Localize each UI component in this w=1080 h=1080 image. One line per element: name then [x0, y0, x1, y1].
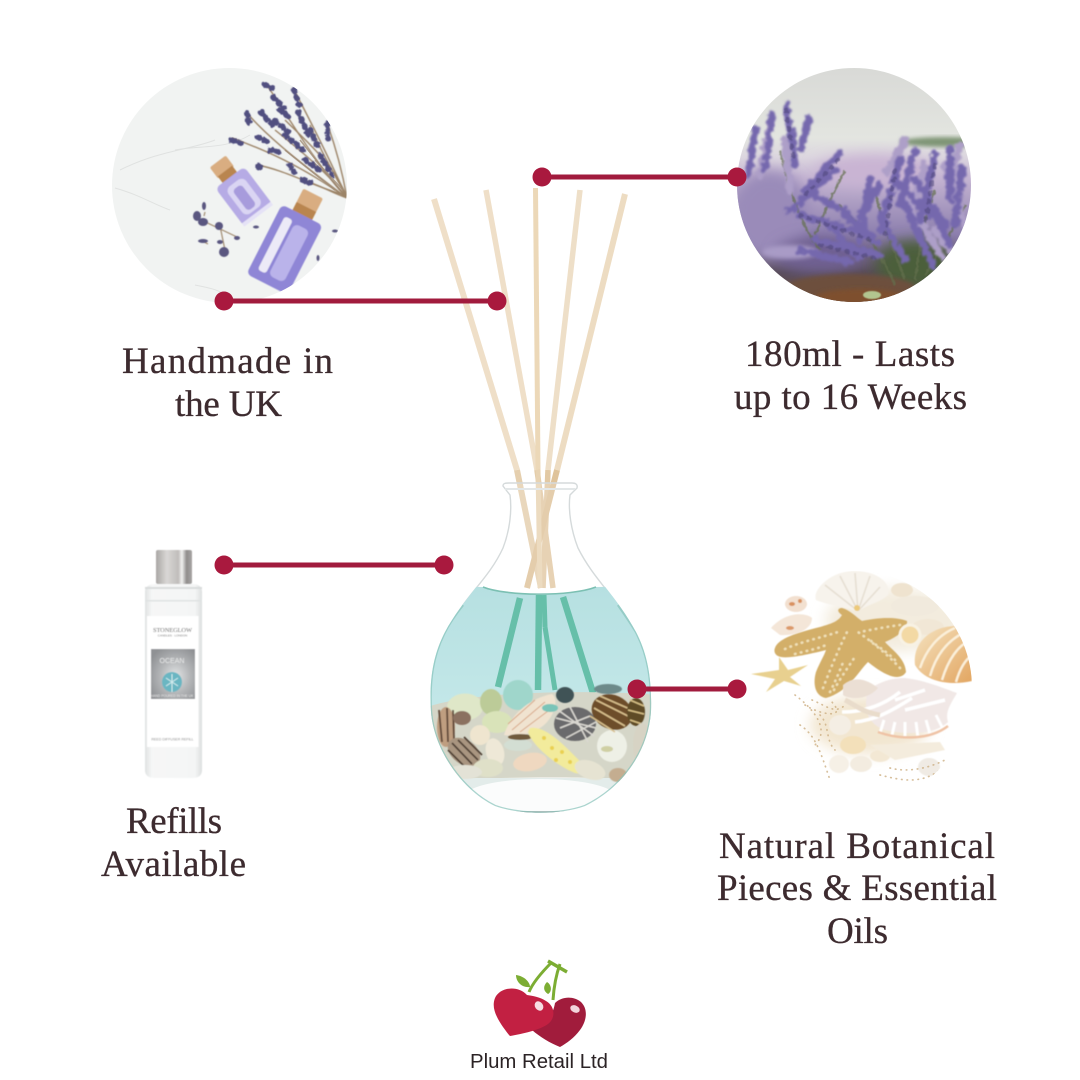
refill bottle product: OCEAN	[160, 658, 184, 665]
reeds within neck	[517, 470, 541, 588]
small bottle	[210, 156, 272, 226]
submerged reeds	[498, 595, 593, 693]
refill bottle cap	[156, 550, 192, 584]
refill bottle product: HAND POURED IN THE UK	[151, 694, 194, 698]
text: natural botanical pieces and essential oils: Oils	[827, 911, 888, 952]
conch shell	[842, 678, 957, 738]
small shells upper left	[771, 583, 944, 635]
text: handmade in the UK: Handmade in	[122, 341, 333, 382]
shell bed background	[425, 692, 660, 782]
logo red heart	[494, 989, 553, 1036]
large bottle	[248, 188, 323, 292]
liquid	[420, 586, 660, 720]
logo: Plum Retail Ltd	[470, 961, 608, 1073]
photo circle: lavender oil bottles	[110, 66, 350, 320]
text: natural botanical pieces and essential oils: Pieces & Essential	[717, 868, 997, 909]
text: handmade in the UK: the UK	[175, 384, 282, 425]
small lavender sprig	[193, 202, 338, 261]
connector: refills	[214, 556, 454, 574]
bottom clear base	[462, 778, 618, 790]
logo stems and leaves	[529, 961, 567, 1000]
starfish	[774, 608, 907, 698]
refill bottle product: REED DIFFUSER REFILL	[151, 738, 194, 742]
refill bottle product: CANDLES · LONDON	[158, 634, 187, 638]
reed diffuser bottle with shells	[420, 483, 660, 820]
glass outline lower	[431, 605, 651, 813]
round shell	[900, 625, 920, 645]
shells	[437, 680, 651, 784]
text: 180ml lasts up to 16 weeks: 180ml - Lasts	[745, 334, 955, 375]
refill bottle product: STONEGLOW	[153, 627, 193, 634]
text: refills available: Available	[101, 844, 246, 885]
text: 180ml lasts up to 16 weeks: up to 16 Weeks	[734, 377, 967, 418]
lavender blooms	[748, 104, 965, 285]
top scallop shell	[815, 571, 889, 612]
lavender bunch	[232, 85, 347, 198]
glass outline upper	[463, 483, 618, 605]
refill bottle body	[145, 584, 202, 778]
connector: handmade	[214, 292, 506, 310]
logo name: Plum Retail Ltd	[470, 1051, 608, 1073]
text: natural botanical pieces and essential oils: Natural Botanical	[719, 826, 995, 867]
refill bottle product	[145, 550, 202, 778]
photo circle: lavender field	[737, 68, 971, 302]
little shells lower area	[829, 715, 945, 776]
text: refills available: Refills	[126, 801, 222, 842]
small starfish	[751, 657, 808, 692]
connector: 180ml	[532, 168, 746, 186]
connector: botanicals	[628, 680, 746, 698]
photo circle: sea shells and starfish	[751, 571, 972, 781]
logo dark heart	[532, 998, 586, 1047]
sand specks	[795, 695, 945, 780]
refill bottle label	[147, 616, 198, 747]
reed sticks	[434, 188, 625, 588]
ribbed scallop	[915, 626, 973, 683]
